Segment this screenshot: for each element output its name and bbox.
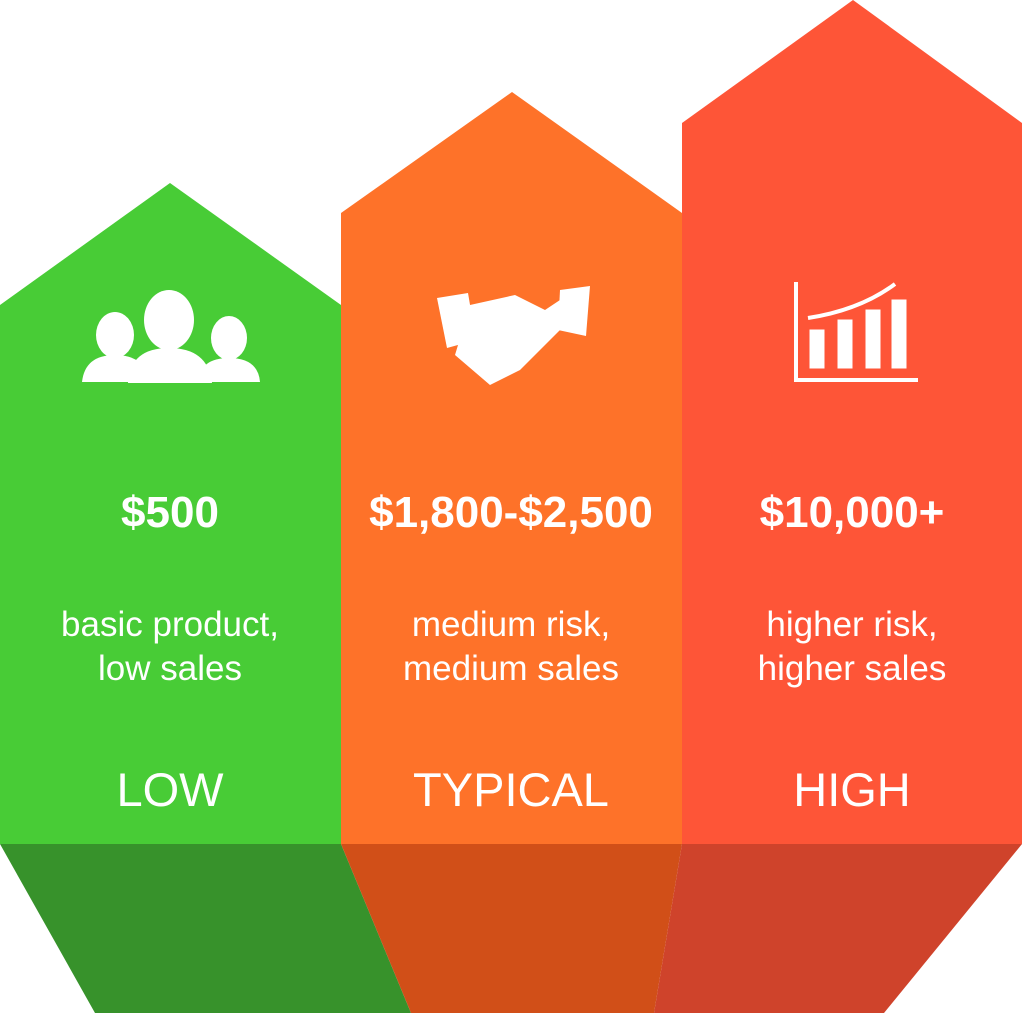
desc: high: higher sales	[758, 649, 946, 688]
label: high: HIGH	[793, 763, 911, 816]
panel: low	[0, 183, 411, 1013]
icon: bar chart	[796, 282, 918, 380]
desc: typical: medium risk,	[412, 605, 610, 644]
desc: high	[758, 605, 946, 688]
desc: low: low sales	[98, 649, 242, 688]
desc: typical	[403, 605, 619, 688]
price: typical: $1,800-$2,500	[369, 488, 653, 537]
desc: high: higher risk,	[766, 605, 938, 644]
label: typical: TYPICAL	[413, 763, 609, 816]
price: low: $500	[121, 488, 219, 537]
panel: high	[654, 0, 1022, 1013]
desc: low	[61, 605, 279, 688]
desc: typical: medium sales	[403, 649, 619, 688]
icon: people	[82, 290, 260, 383]
icon: handshake	[437, 286, 590, 385]
desc: low: basic product,	[61, 605, 279, 644]
label: low: LOW	[116, 763, 224, 816]
price: high: $10,000+	[760, 488, 944, 537]
panel: typical	[341, 92, 682, 1013]
